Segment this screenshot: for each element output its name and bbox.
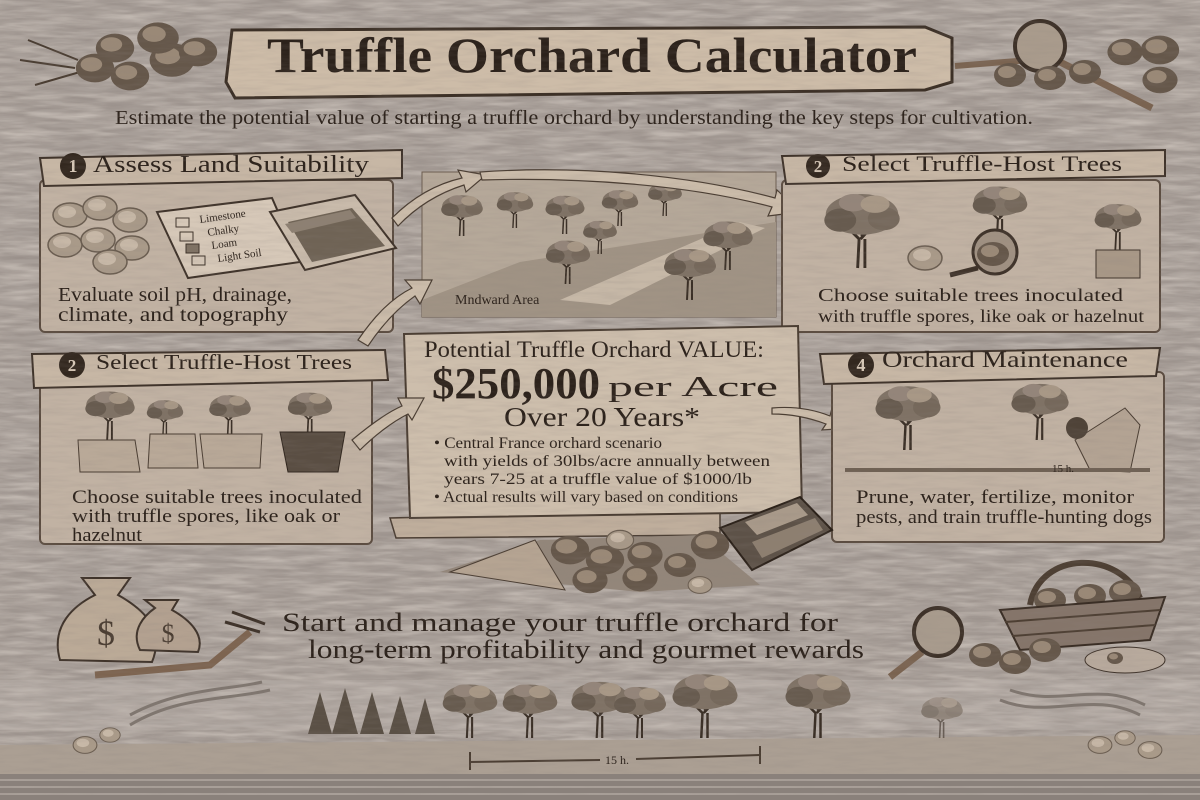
- step 1 text: Evaluate soil pH, drainage,: [58, 284, 292, 306]
- step 2 text: Choose suitable trees inoculated: [818, 285, 1123, 305]
- soil checklist: Chalky: [207, 223, 240, 239]
- step 2 banner: 2: [814, 157, 822, 176]
- step 1 banner: [40, 150, 402, 186]
- closing message: Start and manage your truffle orchard for: [282, 608, 838, 637]
- soil rocks illustration: [48, 196, 149, 274]
- left step text: with truffle spores, like oak or: [72, 506, 341, 527]
- arrow: to orchard scene lower: [358, 280, 432, 346]
- pH colour chart: [270, 195, 396, 270]
- value heading: Potential Truffle Orchard VALUE:: [424, 337, 764, 362]
- intro text: Estimate the potential value of starting a truffle orchard by understanding the key steps for cultivation.: [115, 107, 1033, 129]
- step 4 text: pests, and train truffle-hunting dogs: [856, 507, 1152, 528]
- value figure: $250,000: [432, 359, 600, 408]
- icon: truffle pile top left: [20, 22, 217, 90]
- calculator: [720, 497, 832, 570]
- step 4 banner: [820, 347, 1160, 384]
- tree line: 15 h.: [605, 753, 629, 767]
- orchard label: Mndward Area: [455, 293, 540, 308]
- panel: orchard scene: [422, 172, 776, 317]
- soil checklist: Light Soil: [217, 247, 262, 265]
- step 2 left banner: Select Truffle-Host Trees: [96, 350, 352, 374]
- closing message: long-term profitability and gourmet rewards: [308, 635, 864, 664]
- step 2 left banner: [32, 350, 388, 388]
- left step text: Choose suitable trees inoculated: [72, 487, 363, 508]
- arrow: step 1 to scene: [392, 170, 486, 226]
- step 2 banner: [782, 150, 1165, 184]
- icon: money bags and tools: [58, 578, 265, 675]
- step 1 banner: Assess Land Suitability: [93, 152, 369, 178]
- step 4 banner: Orchard Maintenance: [882, 347, 1128, 372]
- icon: money bags and tools: $: [97, 613, 115, 653]
- orchard and dog illustration: 15 h.: [1052, 463, 1074, 475]
- scenario notes: with yields of 30lbs/acre annually between: [444, 453, 770, 470]
- panel: orchard maintenance: [820, 347, 1164, 542]
- step 4 banner: 4: [856, 355, 866, 375]
- icon: truffle pile and calculator: [440, 497, 832, 593]
- step 1 text: climate, and topography: [58, 304, 288, 326]
- panel: select trees left: [32, 350, 388, 546]
- arrow: left panel to value: [352, 398, 424, 450]
- soil checklist: [157, 198, 300, 278]
- panel: select trees top right: [782, 150, 1165, 332]
- arrow: arc to step 2: [480, 170, 800, 216]
- value period: Over 20 Years*: [504, 402, 700, 432]
- arrow: value to maintenance: [772, 407, 852, 430]
- scenario notes: years 7-25 at a truffle value of $1000/lb: [444, 471, 752, 488]
- step 2 banner: Select Truffle-Host Trees: [842, 151, 1122, 176]
- icon: magnifier and truffles top right: [955, 21, 1179, 108]
- step 1 banner: 1: [68, 156, 78, 176]
- tree illustrations: [824, 186, 1141, 278]
- step 4 text: Prune, water, fertilize, monitor: [856, 487, 1135, 508]
- left step text: hazelnut: [72, 525, 143, 546]
- title: Truffle Orchard Calculator: [267, 27, 917, 83]
- icon: money bags and tools: $: [162, 619, 174, 648]
- panel: assess land suitability: [40, 150, 402, 332]
- soil checklist: Loam: [211, 236, 238, 252]
- step 2 left banner: 2: [68, 356, 76, 375]
- potted saplings: [78, 392, 345, 472]
- closing message: [282, 608, 864, 664]
- panel: potential value scroll: [390, 326, 802, 538]
- soil checklist: Limestone: [199, 208, 247, 226]
- scenario notes: • Actual results will vary based on conditions: [434, 489, 738, 506]
- scenario notes: • Central France orchard scenario: [434, 435, 662, 452]
- icon: ground rock clusters: [73, 728, 1162, 758]
- icon: basket, magnifier and truffles: [890, 563, 1165, 677]
- step 2 text: with truffle spores, like oak or hazelnut: [818, 306, 1144, 326]
- orchard and dog illustration: [845, 384, 1150, 475]
- tree line: [308, 674, 963, 770]
- title banner: [226, 27, 952, 98]
- panel: potential value scroll: per Acre: [608, 371, 778, 403]
